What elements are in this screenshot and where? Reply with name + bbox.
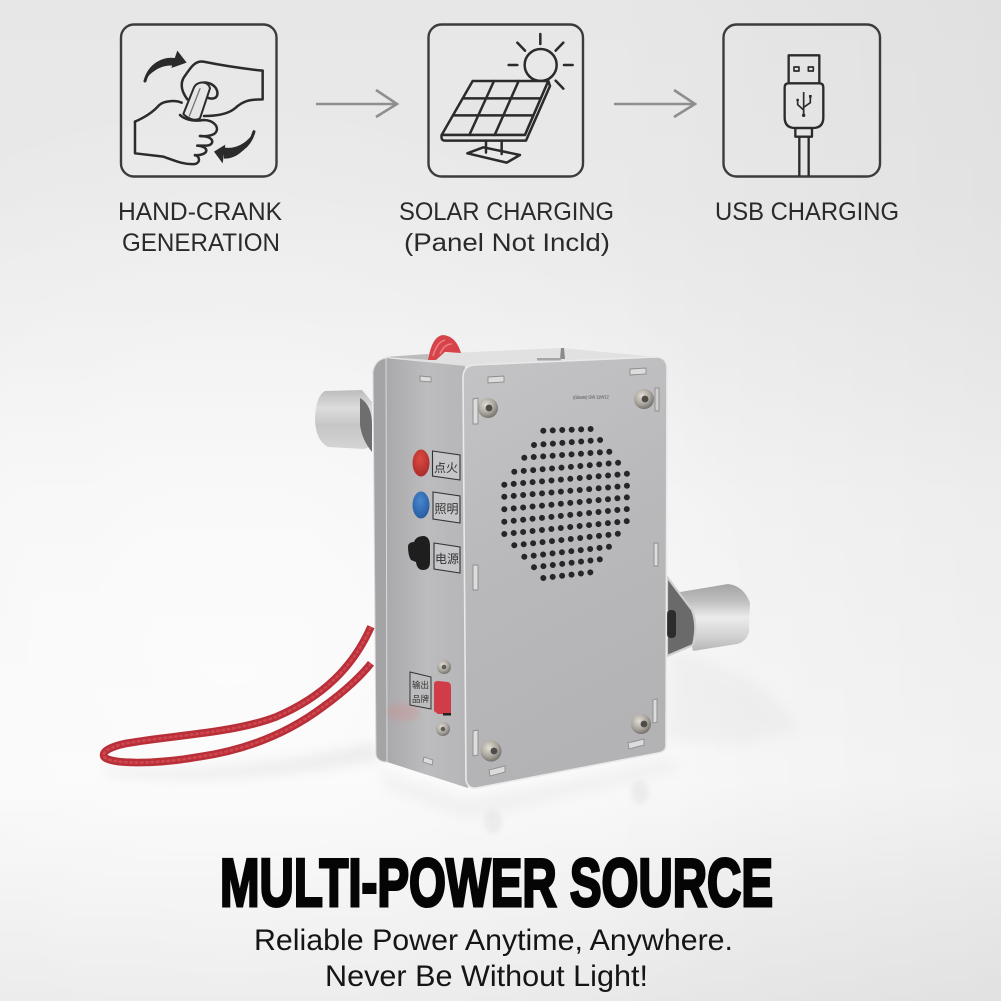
label: USB charging: USB CHARGING bbox=[715, 198, 899, 226]
icon: hand-crank generation bbox=[121, 24, 276, 176]
side flange bbox=[373, 358, 387, 762]
arrow: solar to USB bbox=[614, 90, 695, 117]
label: solar charging: (Panel Not Incld) bbox=[404, 229, 610, 257]
red button bbox=[412, 450, 430, 476]
speaker grille bbox=[504, 429, 628, 578]
label: lighting: 照明 bbox=[434, 502, 459, 516]
label: solar charging bbox=[399, 198, 614, 257]
label: hand-crank generation bbox=[118, 198, 282, 257]
label: power: 电源 bbox=[435, 552, 459, 566]
front panel bbox=[463, 357, 667, 788]
title: MULTI-POWER SOURCE bbox=[220, 845, 773, 921]
arrow: hand-crank to solar bbox=[316, 90, 397, 117]
side controls bbox=[408, 450, 460, 573]
side panel bbox=[386, 358, 468, 788]
subtitle: Never Be Without Light! bbox=[325, 960, 648, 993]
icon: USB charging bbox=[724, 24, 880, 176]
device: multi-power generator bbox=[315, 335, 750, 788]
label: solar charging: SOLAR CHARGING bbox=[399, 198, 614, 226]
charge port area: 品牌 bbox=[412, 694, 430, 704]
charge port area: 输出 bbox=[412, 680, 429, 690]
red tint near side port bbox=[387, 703, 419, 721]
right crank knob bbox=[667, 577, 750, 656]
label: hand-crank generation: GENERATION bbox=[122, 229, 280, 257]
small model text: (Gbwtn) SW 11W12 bbox=[573, 394, 609, 400]
left crank knob bbox=[315, 390, 372, 452]
red cord loop bbox=[104, 627, 371, 763]
blue button bbox=[412, 492, 430, 518]
screws on front panel bbox=[478, 389, 654, 762]
floor reflection and shadow bbox=[100, 650, 800, 834]
cord knot on top bbox=[428, 335, 461, 360]
top face bbox=[385, 348, 658, 367]
slots on panels bbox=[420, 368, 659, 776]
subtitle: Reliable Power Anytime, Anywhere. bbox=[254, 924, 733, 957]
label: ignition: 点火 bbox=[434, 461, 458, 475]
icon: solar charging bbox=[428, 24, 583, 176]
black switch bbox=[408, 536, 430, 570]
label: hand-crank generation: HAND-CRANK bbox=[118, 198, 282, 226]
charge port area bbox=[410, 660, 451, 736]
subtitle bbox=[254, 924, 733, 993]
